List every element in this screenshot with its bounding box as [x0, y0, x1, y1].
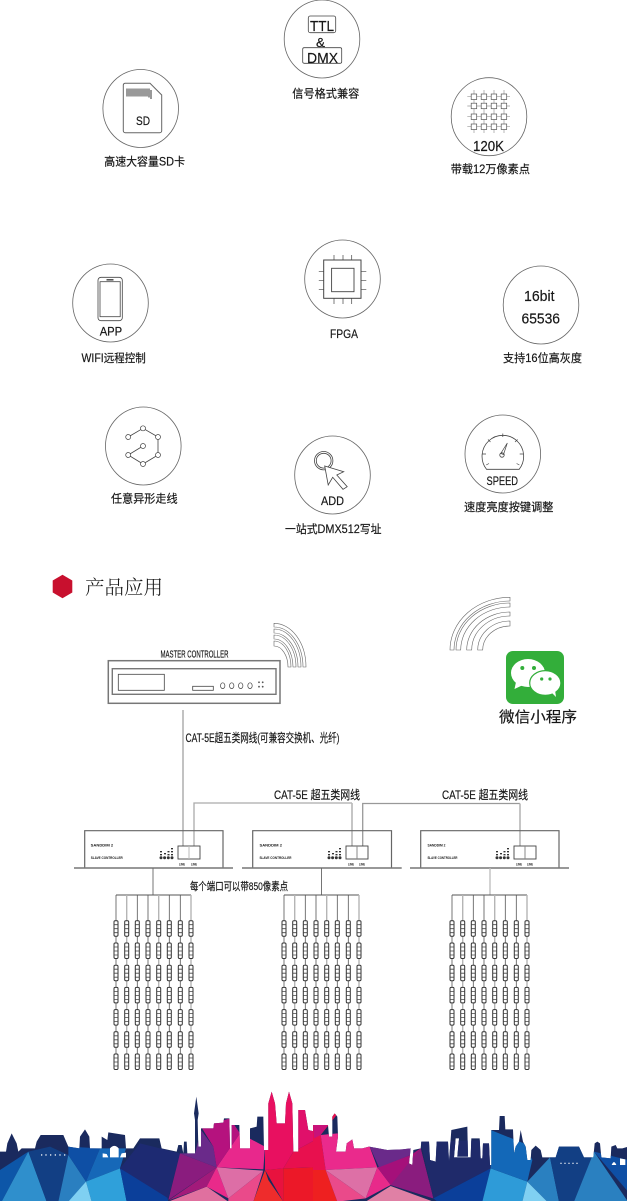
skyline left half	[0, 1092, 313, 1201]
feature: 16-bit grayscale	[503, 266, 582, 365]
slave controller 2: LINE	[348, 862, 354, 866]
slave controller 3: LINE	[527, 862, 533, 866]
icon: 16bit 65536: 65536	[522, 312, 560, 328]
slave controller 3	[410, 831, 569, 868]
feature: 16-bit grayscale: 支持16位高灰度	[503, 351, 582, 365]
feature: speed and brightness buttons	[464, 415, 554, 514]
icon: WeChat	[506, 651, 564, 704]
icon: phone: APP	[100, 324, 122, 338]
feature: WIFI remote control: WIFI远程控制	[82, 351, 146, 365]
feature: signal format compatibility	[284, 0, 360, 100]
feature: FPGA: FPGA	[330, 327, 358, 341]
skyline banner	[0, 1080, 627, 1201]
heading: product application: 产品应用	[85, 572, 163, 600]
feature: arbitrary shape wiring: 任意异形走线	[111, 492, 178, 506]
label: pixels per port: 每个端口可以带850像素点	[190, 879, 288, 893]
pixel strings group 3	[450, 868, 529, 1070]
slave controller 3: LINE	[516, 862, 522, 866]
icon: chip	[319, 255, 366, 304]
slave controller 2	[242, 831, 402, 868]
feature: 120K pixel load: 带载12万像素点	[451, 163, 530, 176]
icon: SD card: SD	[136, 116, 150, 128]
slave controller 1: SANDDIM 2	[91, 842, 114, 848]
feature: arbitrary shape wiring	[106, 407, 181, 506]
slave controller 2: LINE	[359, 862, 365, 866]
slave controller 2: SLAVE CONTROLLER	[260, 855, 292, 860]
feature: high speed SD card	[103, 70, 185, 168]
icon: 16bit 65536	[522, 288, 560, 328]
pixel strings group 2	[282, 868, 361, 1070]
slave controller 3: SLAVE CONTROLLER	[428, 855, 458, 860]
feature: one-stop DMX512 addressing	[285, 436, 382, 536]
feature: 120K pixel load	[451, 78, 530, 176]
label: WeChat mini program: 微信小程序	[499, 709, 577, 726]
icon: TTL and DMX: &	[316, 36, 326, 50]
feature: speed and brightness buttons: 速度亮度按键调整	[464, 500, 554, 514]
slave controller 2: SANDDIM 2	[260, 842, 283, 848]
slave controller 3: SANDDIM 2	[428, 842, 446, 848]
master controller: MASTER CONTROLLER	[160, 650, 228, 660]
slave controller 1	[74, 831, 233, 868]
feature: signal format compatibility: 信号格式兼容	[292, 86, 360, 100]
feature: high speed SD card: 高速大容量SD卡	[104, 154, 185, 168]
icon: pixel grid: 120K	[473, 139, 504, 155]
icon: node network	[126, 426, 160, 466]
master controller	[108, 650, 280, 703]
icon: 16bit 65536: 16bit	[524, 288, 555, 305]
icon: click cursor: ADD	[321, 494, 344, 508]
feature: FPGA	[305, 240, 380, 341]
label: cable 1: CAT-5E 超五类网线	[274, 787, 360, 802]
icon: TTL and DMX: TTL	[310, 18, 334, 35]
cable: slave 2 to slave 3	[363, 804, 520, 846]
cable: slave 1 to slave 2	[194, 803, 352, 846]
icon: mini program wireless signal	[450, 597, 510, 650]
icon: TTL and DMX: DMX	[307, 50, 338, 67]
icon: master wireless signal	[274, 623, 306, 667]
pixel strings group 1	[114, 868, 193, 1070]
label: cable note: CAT-5E超五类网线(可兼容交换机、光纤)	[186, 730, 340, 745]
slave controller 1: LINE	[179, 862, 185, 866]
slave controller 1: LINE	[191, 862, 197, 866]
icon: TTL and DMX	[303, 16, 342, 67]
skyline right half	[313, 1114, 627, 1201]
feature: WIFI remote control	[73, 264, 148, 365]
cable: master to slave	[182, 710, 184, 846]
label: cable 2: CAT-5E 超五类网线	[442, 787, 528, 802]
icon: speedometer: SPEED	[486, 474, 518, 488]
feature: one-stop DMX512 addressing: 一站式DMX512写址	[285, 522, 382, 536]
slave controller 1: SLAVE CONTROLLER	[91, 855, 123, 860]
